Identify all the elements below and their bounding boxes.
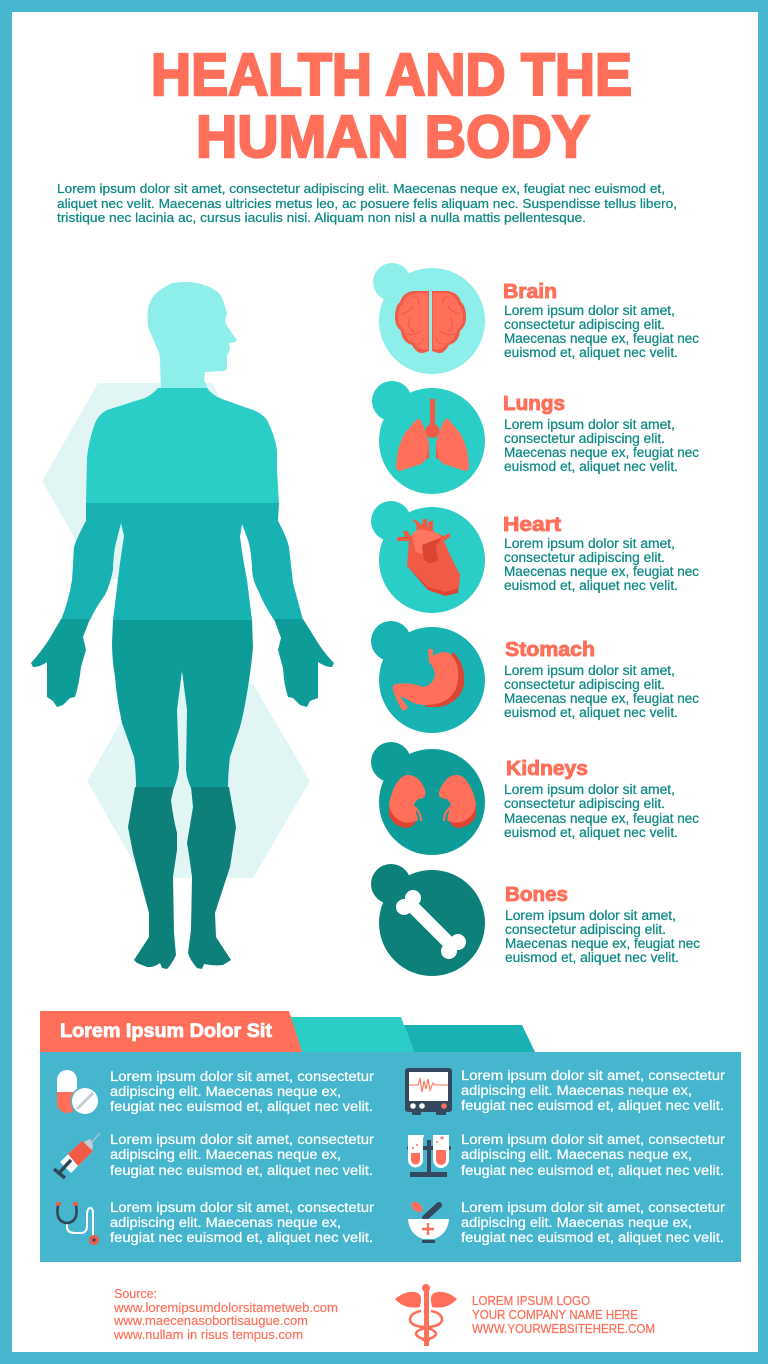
logo text: LOREM IPSUM LOGO (472, 1293, 590, 1308)
heading: Lungs: Lungs (503, 393, 565, 415)
intro text: tristique nec lacinia ac, cursus iaculis nisi. Aliquam non nisl a nulla mattis pellentesque. (57, 210, 586, 225)
panel: lungs (372, 381, 699, 494)
icon: stethoscope (56, 1204, 99, 1245)
logo text: WWW.YOURWEBSITEHERE.COM (472, 1321, 655, 1336)
text: Bones: euismod et, aliquet nec velit. (505, 950, 679, 965)
panel: bones (371, 864, 700, 976)
heart badge (371, 501, 485, 613)
text: stethoscope (110, 1200, 374, 1246)
body: left lower leg (128, 787, 177, 969)
body: right hand (274, 619, 334, 707)
text: syringe: adipiscing elit. Maecenas neque ex, (110, 1147, 341, 1163)
text: pills: adipiscing elit. Maecenas neque ex, (110, 1084, 341, 1100)
body: right lower leg (187, 787, 236, 969)
source list: www.maecenasobortisaugue.com (113, 1313, 308, 1328)
text: syringe: feugiat nec euismod et, aliquet nec velit. (110, 1163, 373, 1179)
title: HUMAN BODY (196, 104, 590, 170)
source list: www.nullam in risus tempus.com (113, 1327, 303, 1342)
text: pills (110, 1069, 374, 1115)
tab: teal (289, 1017, 414, 1052)
text: heart monitor (461, 1068, 725, 1114)
text: pills: Lorem ipsum dolor sit amet, consectetur (110, 1069, 374, 1085)
icon: lungs (396, 399, 469, 471)
text: Lungs: Lorem ipsum dolor sit amet, (504, 417, 675, 432)
text: stethoscope: feugiat nec euismod et, aliquet nec velit. (110, 1230, 373, 1246)
text: syringe (110, 1132, 374, 1179)
text: Stomach: Maecenas neque ex, feugiat nec (504, 691, 699, 706)
icon: bone (396, 890, 466, 959)
heading: Kidneys: Kidneys (506, 758, 588, 780)
panel: tips section (40, 1011, 741, 1262)
heading: Bones: Bones (505, 884, 568, 906)
brain badge (373, 263, 485, 374)
text: Brain (504, 303, 699, 360)
icon: stomach (393, 649, 464, 711)
text: pills: feugiat nec euismod et, aliquet nec velit. (110, 1099, 373, 1115)
text: Brain: consectetur adipiscing elit. (504, 317, 665, 332)
intro text: aliquet nec velit. Maecenas ultricies metus leo, ac posuere felis aliquam nec. Suspendisse tellus libero, (57, 196, 677, 211)
text: Heart: consectetur adipiscing elit. (504, 550, 665, 565)
text: syringe: Lorem ipsum dolor sit amet, consectetur (110, 1132, 374, 1148)
text: Lungs: Maecenas neque ex, feugiat nec (504, 445, 699, 460)
tab: dark teal (404, 1025, 535, 1052)
logo text (472, 1293, 655, 1336)
text: heart monitor: Lorem ipsum dolor sit amet, consectetur (461, 1068, 725, 1084)
text: Lungs: euismod et, aliquet nec velit. (504, 459, 678, 474)
title (151, 42, 632, 170)
intro text (57, 181, 677, 225)
text: stethoscope: adipiscing elit. Maecenas neque ex, (110, 1215, 341, 1231)
text: Kidneys: consectetur adipiscing elit. (504, 796, 665, 811)
source list (113, 1286, 338, 1342)
logo text: YOUR COMPANY NAME HERE (472, 1307, 638, 1322)
body: left hand (31, 619, 90, 707)
text: mortar and pestle (461, 1200, 725, 1246)
icon: syringe (54, 1133, 100, 1178)
text: heart monitor: feugiat nec euismod et, aliquet nec velit. (461, 1098, 724, 1114)
intro text: Lorem ipsum dolor sit amet, consectetur adipiscing elit. Maecenas neque ex, feugiat nec euismod et, (57, 181, 665, 196)
icon: caduceus logo (395, 1284, 457, 1346)
stomach badge (371, 621, 485, 733)
text: Lungs: consectetur adipiscing elit. (504, 431, 665, 446)
text: mortar and pestle: feugiat nec euismod et, aliquet nec velit. (461, 1230, 724, 1246)
background hexagons (42, 383, 310, 878)
text: Stomach: euismod et, aliquet nec velit. (504, 705, 678, 720)
heading: Stomach: Stomach (505, 639, 595, 661)
text: test tubes: adipiscing elit. Maecenas neque ex, (461, 1147, 692, 1163)
text: Stomach: Lorem ipsum dolor sit amet, (504, 663, 675, 678)
icon: kidneys (389, 775, 476, 828)
text: test tubes (461, 1132, 725, 1179)
icon: heart monitor (405, 1068, 452, 1115)
icon: mortar and pestle (408, 1200, 449, 1243)
text: Bones: consectetur adipiscing elit. (505, 922, 666, 937)
panel: stomach (371, 621, 699, 733)
icon: pills (57, 1070, 100, 1116)
text: Bones: Maecenas neque ex, feugiat nec (505, 936, 700, 951)
text: Stomach: consectetur adipiscing elit. (504, 677, 665, 692)
heading: Brain: Brain (503, 281, 557, 303)
text: Kidneys (504, 782, 699, 840)
kidneys badge (371, 742, 485, 855)
text: Brain: Lorem ipsum dolor sit amet, (504, 303, 675, 318)
text: Kidneys: euismod et, aliquet nec velit. (504, 825, 678, 840)
tab: coral heading (40, 1011, 302, 1052)
icon: test tubes (407, 1135, 451, 1177)
section heading: Lorem Ipsum Dolor Sit (60, 1021, 273, 1042)
panel: brain (373, 263, 699, 374)
text: stethoscope: Lorem ipsum dolor sit amet, consectetur (110, 1200, 374, 1216)
text: test tubes: feugiat nec euismod et, aliquet nec velit. (461, 1163, 724, 1179)
text: mortar and pestle: adipiscing elit. Maecenas neque ex, (461, 1215, 692, 1231)
section background (40, 1052, 741, 1262)
text: Bones (505, 908, 700, 965)
text: heart monitor: adipiscing elit. Maecenas neque ex, (461, 1083, 692, 1099)
text: Heart (504, 536, 699, 593)
title: HEALTH AND THE (151, 42, 632, 108)
body: head (148, 282, 237, 389)
text: mortar and pestle: Lorem ipsum dolor sit amet, consectetur (461, 1200, 725, 1216)
panel: kidneys (371, 742, 699, 855)
source list: Source: (114, 1286, 157, 1301)
panel: heart (371, 501, 699, 613)
text: Kidneys: Maecenas neque ex, feugiat nec (504, 811, 699, 826)
text: Lungs (504, 417, 699, 474)
text: Bones: Lorem ipsum dolor sit amet, (505, 908, 676, 923)
text: Brain: Maecenas neque ex, feugiat nec (504, 331, 699, 346)
icon: brain (395, 291, 466, 353)
text: Heart: Lorem ipsum dolor sit amet, (504, 536, 675, 551)
icon: heart (397, 519, 460, 596)
text: Stomach (504, 663, 699, 720)
bones badge (371, 864, 485, 976)
body: chest and shoulders (86, 388, 279, 504)
body: hips and thighs (112, 620, 253, 788)
text: Brain: euismod et, aliquet nec velit. (504, 345, 678, 360)
text: Kidneys: Lorem ipsum dolor sit amet, (504, 782, 675, 797)
text: Heart: Maecenas neque ex, feugiat nec (504, 564, 699, 579)
human body silhouette (31, 282, 334, 969)
lungs badge (372, 381, 485, 494)
heading: Heart: Heart (503, 514, 561, 536)
body: abdomen and arms (61, 503, 303, 620)
text: Heart: euismod et, aliquet nec velit. (504, 578, 678, 593)
text: test tubes: Lorem ipsum dolor sit amet, consectetur (461, 1132, 725, 1148)
source list: www.loremipsumdolorsitametweb.com (113, 1300, 338, 1315)
